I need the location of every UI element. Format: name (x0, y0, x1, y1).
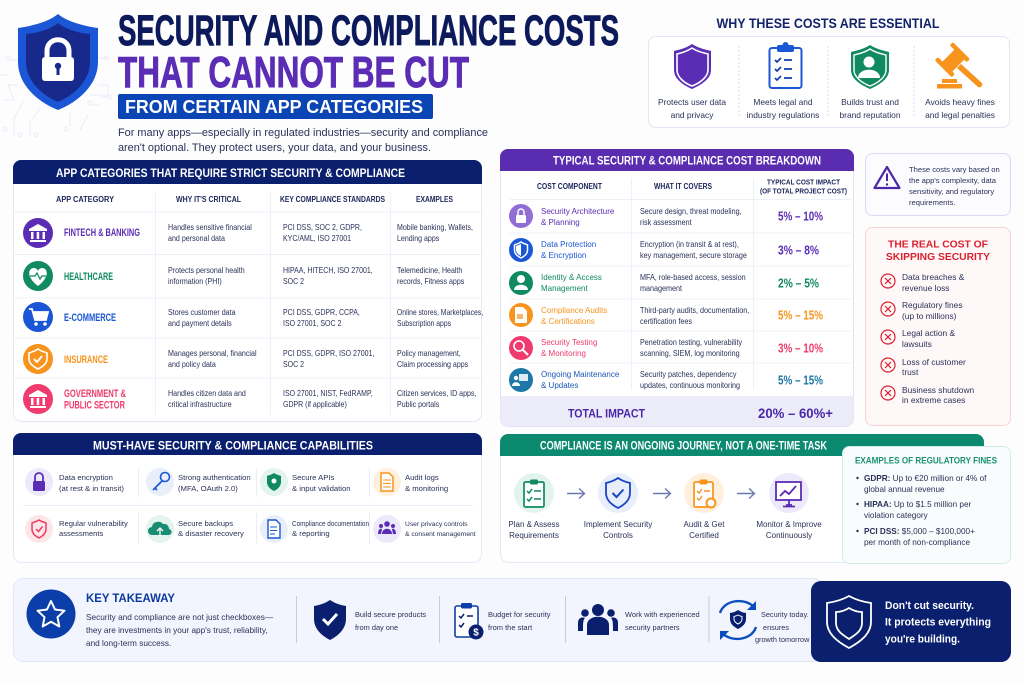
heading: key takeaway: KEY TAKEAWAY (86, 591, 175, 605)
row: e-commerce: ISO 27001, SOC 2 (283, 319, 341, 328)
text: cta message: Don't cut security. (885, 600, 974, 612)
row: compliance audits: 5% – 15% (778, 308, 823, 322)
heading: why these costs: WHY THESE COSTS ARE ESSENTIAL (716, 16, 940, 31)
row: e-commerce: PCI DSS, GDPR, CCPA, (283, 308, 360, 317)
item: budget for security: Budget for security (488, 610, 551, 619)
total impact row: 20% – 60%+ (758, 405, 833, 421)
fine: GDPR: global annual revenue (864, 485, 945, 494)
capability: strong authentication: (MFA, OAuth 2.0) (178, 484, 238, 493)
fine: HIPAA (856, 500, 972, 520)
row: data protection: & Encryption (541, 251, 586, 260)
heading: real cost: SKIPPING SECURITY (886, 252, 990, 263)
table header row (537, 178, 847, 196)
row: identity and access: 2% – 5% (778, 276, 819, 290)
row: government and public sector: critical infrastructure (168, 400, 232, 409)
item: budget for security (455, 603, 551, 640)
icon: gavel (935, 42, 982, 88)
text: protects user data: Protects user data (658, 97, 726, 107)
item: security today: ensures (763, 623, 789, 632)
row: e-commerce: Subscription apps (397, 318, 451, 328)
table header row: WHAT IT COVERS (654, 182, 713, 191)
row: data protection: Data Protection (541, 240, 596, 249)
subtitle pill: FROM CERTAIN APP CATEGORIES (125, 96, 423, 117)
heading: regulatory fines: EXAMPLES OF REGULATORY FINES (855, 456, 997, 466)
item: loss of trust: Loss of customer (902, 357, 966, 367)
capability: compliance documentation: Compliance documentation (292, 519, 369, 528)
callout: costs vary note: sensitivity, and regulatory (909, 187, 994, 196)
row: fintech and banking: Handles sensitive financial (168, 223, 252, 232)
panel: the real cost of skipping security (866, 228, 1010, 426)
step: implement security controls (584, 473, 652, 540)
capability: audit logs: Audit logs (405, 473, 439, 482)
heading: compliance journey (500, 434, 984, 456)
text: meets legal: industry regulations (747, 110, 819, 120)
icon: checklist clipboard (770, 42, 802, 88)
item: work with partners: Work with experienced (625, 610, 700, 619)
step: monitor and improve (756, 473, 822, 540)
row: data protection (509, 238, 819, 262)
item: work with partners (578, 604, 700, 635)
table header row: EXAMPLES (416, 195, 454, 204)
item: security today (720, 601, 810, 644)
capability: compliance documentation (260, 515, 369, 543)
capability: secure APIs: & input validation (292, 484, 351, 493)
step: implement security controls: Implement Security (584, 520, 652, 529)
row: healthcare: records, Fitness apps (397, 277, 464, 286)
capability: vulnerability assessments: Regular vulnerability (59, 519, 128, 528)
row: fintech and banking: and personal data (168, 234, 226, 243)
capability: user privacy controls: & consent management (405, 531, 476, 538)
capability: audit logs (373, 468, 448, 496)
item: regulatory fines (881, 300, 963, 321)
text: takeaway message: and long-term success. (86, 639, 171, 648)
row: security testing: Penetration testing, vulnerability (640, 338, 742, 347)
row: compliance audits: & Certifications (541, 317, 595, 326)
table header row: WHY IT'S CRITICAL (176, 195, 241, 204)
row: insurance: PCI DSS, GDPR, ISO 27001, (283, 349, 374, 358)
intro paragraph: For many apps—especially in regulated industries—security and compliance (118, 127, 488, 139)
capability: secure backups: & disaster recovery (178, 529, 244, 538)
panel: must-have capabilities (13, 433, 482, 562)
fine: PCI DSS: PCI DSS: $5,000 – $100,000+ (864, 527, 975, 536)
text: takeaway message: Security and compliance are not just checkboxes— (86, 613, 274, 622)
row: data protection: 3% – 8% (778, 244, 819, 258)
step: plan and assess (508, 473, 560, 540)
row: identity and access: Management (541, 284, 588, 293)
row: government and public sector: Public portals (397, 400, 439, 409)
row: compliance audits: Compliance Audits (541, 306, 607, 315)
fine: GDPR: GDPR: Up to €20 million or 4% of (864, 474, 986, 483)
step: implement security controls: Controls (603, 531, 633, 540)
panel: app categories table (13, 160, 483, 422)
row: government and public sector: GDPR (if applicable) (283, 400, 347, 409)
row: security testing (509, 336, 823, 360)
row: identity and access: Identity & Access (541, 273, 602, 282)
capability: data encryption: Data encryption (59, 473, 113, 482)
row: insurance: Manages personal, financial (168, 349, 257, 358)
item: build secure products: from day one (355, 623, 398, 632)
step: monitor and improve: Continuously (766, 531, 812, 540)
table header row (56, 195, 454, 204)
row: healthcare: Telemedicine, Health (397, 266, 462, 275)
capability: user privacy controls (373, 515, 476, 543)
row: fintech and banking: KYC/AML, ISO 27001 (283, 234, 351, 243)
fine: PCI DSS (856, 527, 975, 547)
capability: secure APIs (260, 468, 351, 496)
heading: must-have (13, 433, 482, 455)
row: ongoing maintenance: updates, continuous monitoring (640, 381, 740, 390)
row: healthcare: SOC 2 (283, 277, 304, 286)
callout: costs vary note: These costs vary based on (909, 165, 1000, 174)
capability: user privacy controls: User privacy controls (405, 521, 468, 528)
item: loss of trust (881, 357, 966, 377)
fine: PCI DSS: per month of non-compliance (864, 538, 970, 547)
capability: data encryption (25, 468, 124, 496)
row: e-commerce: E-COMMERCE (64, 312, 116, 324)
icon: star (26, 590, 76, 638)
item: legal action (881, 328, 955, 349)
panel: examples of regulatory fines (842, 446, 1010, 564)
capability: strong authentication (146, 468, 251, 496)
row: healthcare: information (PHI) (168, 277, 222, 286)
icon: warning triangle (874, 167, 900, 188)
row: insurance: and policy data (168, 360, 217, 369)
capability: vulnerability assessments (25, 515, 128, 543)
row: security testing: Security Testing (541, 338, 597, 347)
item: budget for security: from the start (488, 623, 533, 632)
row: government and public sector: GOVERNMENT & (64, 388, 126, 400)
panel: why these costs are essential (648, 16, 1010, 128)
panel: cost breakdown table (500, 149, 854, 426)
item: data breaches: Data breaches & (902, 272, 965, 282)
fine: HIPAA: violation category (864, 511, 929, 520)
row: fintech and banking (23, 218, 473, 248)
row: insurance: INSURANCE (64, 354, 108, 366)
item: business shutdown (881, 385, 975, 405)
row: compliance audits (509, 303, 823, 327)
item: data breaches: revenue loss (902, 283, 950, 293)
step: plan and assess: Requirements (509, 531, 559, 540)
text: takeaway message: they are investments in your app's trust, reliability, (86, 626, 268, 635)
title: SECURITY AND COMPLIANCE COSTS (118, 7, 619, 55)
panel: key takeaway (14, 578, 824, 662)
item: business shutdown: Business shutdown (902, 385, 975, 395)
table header row: KEY COMPLIANCE STANDARDS (280, 195, 386, 204)
heading: must-have: MUST-HAVE SECURITY & COMPLIANCE CAPABILITIES (93, 438, 373, 452)
row: insurance: Claim processing apps (397, 360, 468, 369)
table header row: TYPICAL COST IMPACT (767, 178, 840, 186)
table header row: APP CATEGORY (56, 195, 115, 204)
row: government and public sector: Handles citizen data and (168, 389, 246, 398)
table header row: COST COMPONENT (537, 182, 602, 191)
callout: costs vary note: requirements. (909, 198, 955, 207)
text: avoids fines: Avoids heavy fines (925, 97, 995, 107)
text: builds trust: brand reputation (840, 110, 901, 120)
capability: secure backups: Secure backups (178, 519, 233, 528)
row: government and public sector: ISO 27001, NIST, FedRAMP, (283, 389, 373, 398)
text: cta message: you're building. (885, 634, 960, 646)
item: security today: growth tomorrow (755, 635, 810, 644)
heading: compliance journey: COMPLIANCE IS AN ONGOING JOURNEY, NOT A ONE-TIME TASK (540, 438, 827, 452)
row: ongoing maintenance: Ongoing Maintenance (541, 370, 620, 379)
heading: app categories (13, 160, 482, 184)
row: fintech and banking: FINTECH & BANKING (64, 227, 140, 239)
row: compliance audits: Third-party audits, documentation, (640, 306, 749, 315)
row: ongoing maintenance: & Updates (541, 381, 578, 390)
heading: cost breakdown (500, 149, 854, 171)
row: ongoing maintenance (509, 368, 823, 392)
icon: main shield with lock (18, 14, 98, 110)
row: insurance: Policy management, (397, 349, 461, 358)
arrow (653, 488, 670, 498)
table header row: (OF TOTAL PROJECT COST) (760, 186, 847, 196)
row: ongoing maintenance: Security patches, dependency (640, 370, 737, 379)
capability: secure APIs: Secure APIs (292, 473, 334, 482)
row: insurance (23, 344, 468, 374)
callout: costs vary note: the app's complexity, data (909, 176, 997, 185)
row: fintech and banking: PCI DSS, SOC 2, GDPR, (283, 223, 362, 232)
row: security architecture: risk assessment (640, 218, 692, 227)
intro paragraph (118, 127, 488, 154)
panel: compliance journey (500, 434, 984, 562)
item: legal action: lawsuits (902, 339, 932, 349)
title (118, 7, 619, 97)
row: government and public sector: Citizen services, ID apps, (397, 389, 476, 398)
item: legal action: Legal action & (902, 328, 955, 338)
callout: don't cut security (811, 581, 1011, 662)
icon: purple shield (674, 44, 711, 89)
item: build secure products: Build secure products (355, 610, 426, 619)
row: security architecture: Security Architecture (541, 207, 615, 216)
step: audit and get certified (684, 473, 725, 540)
icon: outline shield (827, 596, 871, 648)
row: security testing: & Monitoring (541, 349, 586, 358)
row: fintech and banking: Mobile banking, Wallets, (397, 223, 473, 232)
heading: app categories: APP CATEGORIES THAT REQUIRE STRICT SECURITY & COMPLIANCE (56, 166, 405, 180)
arrow (737, 488, 754, 498)
row: insurance: SOC 2 (283, 360, 304, 369)
row: security testing: scanning, SIEM, log monitoring (640, 349, 740, 358)
row: fintech and banking: Lending apps (397, 234, 439, 243)
row: security architecture: Secure design, threat modeling, (640, 207, 742, 216)
text: protects user data: and privacy (671, 110, 714, 120)
capability: data encryption: (at rest & in transit) (59, 484, 124, 493)
text: builds trust: Builds trust and (841, 97, 899, 107)
heading: cost breakdown: TYPICAL SECURITY & COMPLIANCE COST BREAKDOWN (553, 154, 821, 168)
row: government and public sector (23, 384, 476, 414)
step: audit and get certified: Certified (689, 531, 719, 540)
total impact row (500, 396, 854, 426)
row: healthcare: HIPAA, HITECH, ISO 27001, (283, 266, 373, 275)
step: monitor and improve: Monitor & Improve (756, 520, 822, 529)
row: security testing: 3% – 10% (778, 342, 823, 356)
row: security architecture (509, 204, 823, 228)
text: meets legal: Meets legal and (753, 97, 813, 107)
item: security today: Security today. (761, 610, 809, 619)
item: data breaches (881, 272, 965, 293)
capability: vulnerability assessments: assessments (59, 529, 104, 538)
row: healthcare: Protects personal health (168, 266, 245, 275)
item: business shutdown: in extreme cases (902, 395, 965, 405)
fine: HIPAA: HIPAA: Up to $1.5 million per (864, 500, 971, 509)
text: cta message (885, 600, 991, 646)
row: security architecture: & Planning (541, 218, 580, 227)
row: data protection: Encryption (in transit & at rest), (640, 240, 739, 249)
step: audit and get certified: Audit & Get (684, 520, 725, 529)
text: avoids fines: and legal penalties (925, 110, 995, 120)
item: regulatory fines: (up to millions) (902, 311, 957, 321)
heading: real cost: THE REAL COST OF (888, 240, 988, 250)
row: compliance audits: certification fees (640, 317, 692, 326)
row: security architecture: 5% – 10% (778, 210, 823, 224)
item: work with partners: security partners (625, 623, 680, 632)
item: build secure products (314, 600, 426, 640)
row: e-commerce: Stores customer data (168, 308, 236, 317)
capability: compliance documentation: & reporting (292, 529, 330, 538)
row: healthcare (23, 261, 464, 291)
capability: audit logs: & monitoring (405, 484, 448, 493)
item: loss of trust: trust (902, 367, 919, 377)
row: data protection: key management, secure storage (640, 251, 747, 260)
row: healthcare: HEALTHCARE (64, 271, 113, 283)
row: e-commerce: and payment details (168, 319, 232, 328)
fine: GDPR (856, 474, 987, 494)
row: identity and access: MFA, role-based access, session (640, 273, 746, 282)
total impact row: TOTAL IMPACT (568, 406, 646, 420)
title: THAT CANNOT BE CUT (118, 48, 469, 97)
row: government and public sector: PUBLIC SECTOR (64, 400, 125, 412)
arrow (567, 488, 584, 498)
text: cta message: It protects everything (885, 616, 991, 628)
step: plan and assess: Plan & Assess (508, 520, 560, 529)
row: ongoing maintenance: 5% – 15% (778, 374, 823, 388)
capability: strong authentication: Strong authentication (178, 473, 251, 482)
capability: secure backups (146, 515, 244, 543)
row: identity and access: management (640, 284, 683, 293)
row: e-commerce: Online stores, Marketplaces, (397, 307, 483, 317)
row: e-commerce (23, 302, 483, 332)
item: regulatory fines: Regulatory fines (902, 300, 963, 310)
item: budget for security: $ (473, 628, 479, 638)
icon: green shield with person (851, 45, 889, 89)
intro paragraph: aren't optional. They protect users, your data, and your business. (118, 142, 431, 154)
callout: costs vary note (866, 154, 1010, 216)
row: identity and access (509, 271, 819, 295)
